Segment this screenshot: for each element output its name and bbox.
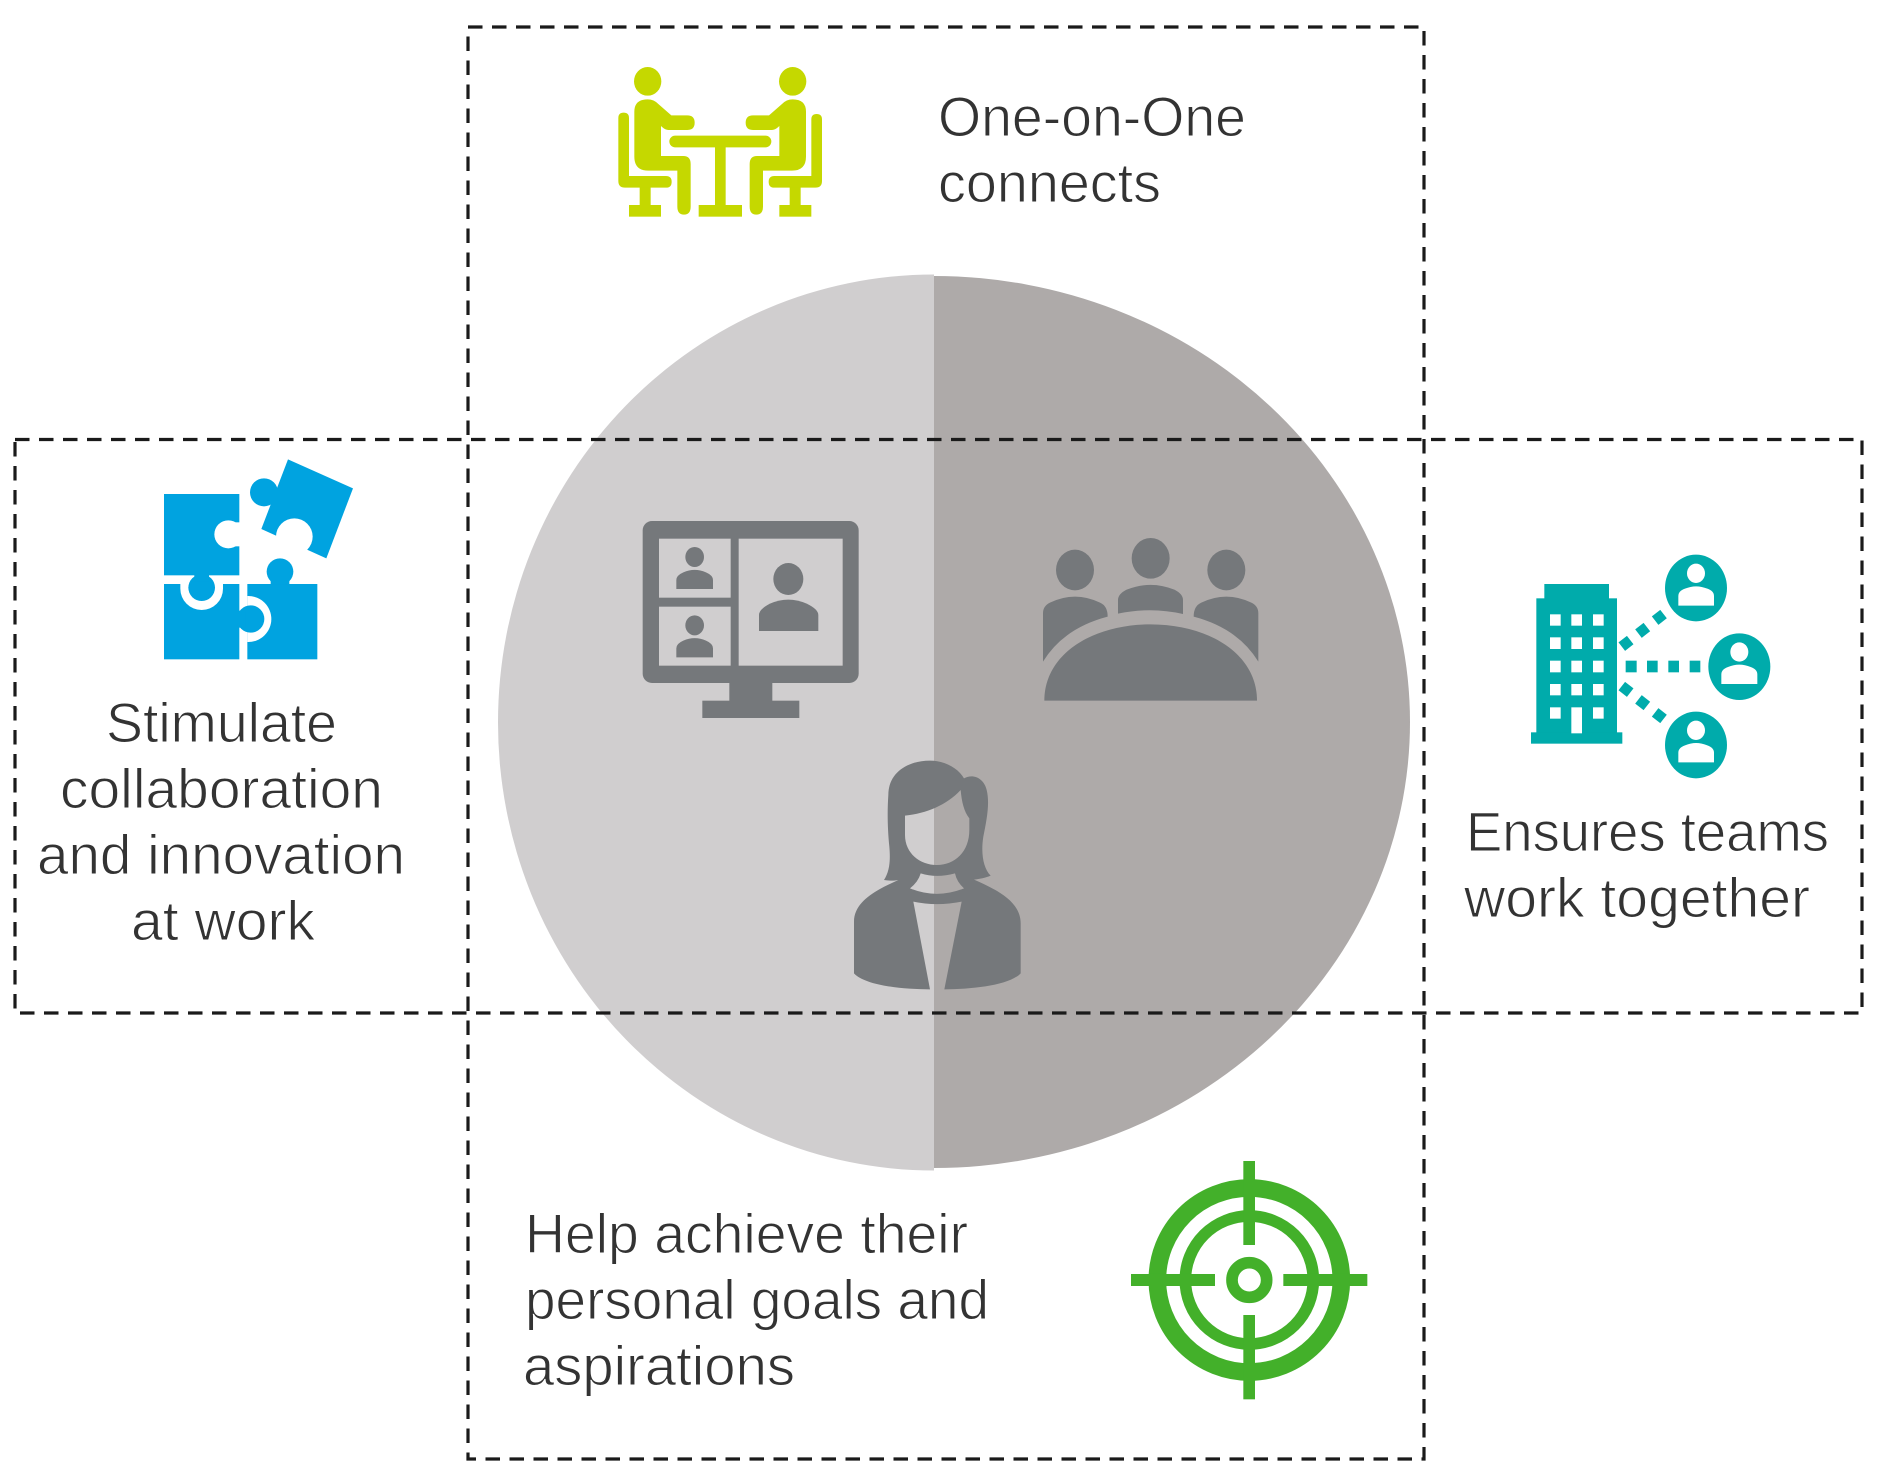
text: help achieve goals: Help achieve their [525,1203,968,1265]
text: stimulate collaboration: and innovation [37,824,405,886]
text: stimulate collaboration: at work [131,890,315,952]
text: help achieve goals: personal goals and [525,1269,989,1331]
text: stimulate collaboration: collaboration [60,758,383,820]
text: stimulate collaboration: Stimulate [106,692,337,754]
text: help achieve goals [523,1203,989,1397]
text: stimulate collaboration [37,692,405,952]
icon: puzzle pieces [164,459,353,659]
text: ensures teams work together: work together [1463,867,1810,929]
text: one-on-one connects: One-on-One [938,86,1246,148]
icon: one-on-one meeting [618,67,822,217]
icon: meeting around a table [1043,538,1258,701]
icon: businesswoman [854,761,1021,989]
text: one-on-one connects: connects [938,152,1161,214]
text: help achieve goals: aspirations [523,1335,795,1397]
icon: monitor with video call [643,521,859,718]
dashed frame: vertical panel [468,27,1424,1459]
icon: target [1131,1161,1367,1399]
icon: building connected to people [1531,555,1770,778]
text: ensures teams work together: Ensures teams [1466,801,1829,863]
text: one-on-one connects [938,86,1246,214]
text: ensures teams work together [1463,801,1829,929]
dashed frame: horizontal panel [15,440,1862,1013]
central circle [498,274,1410,1170]
